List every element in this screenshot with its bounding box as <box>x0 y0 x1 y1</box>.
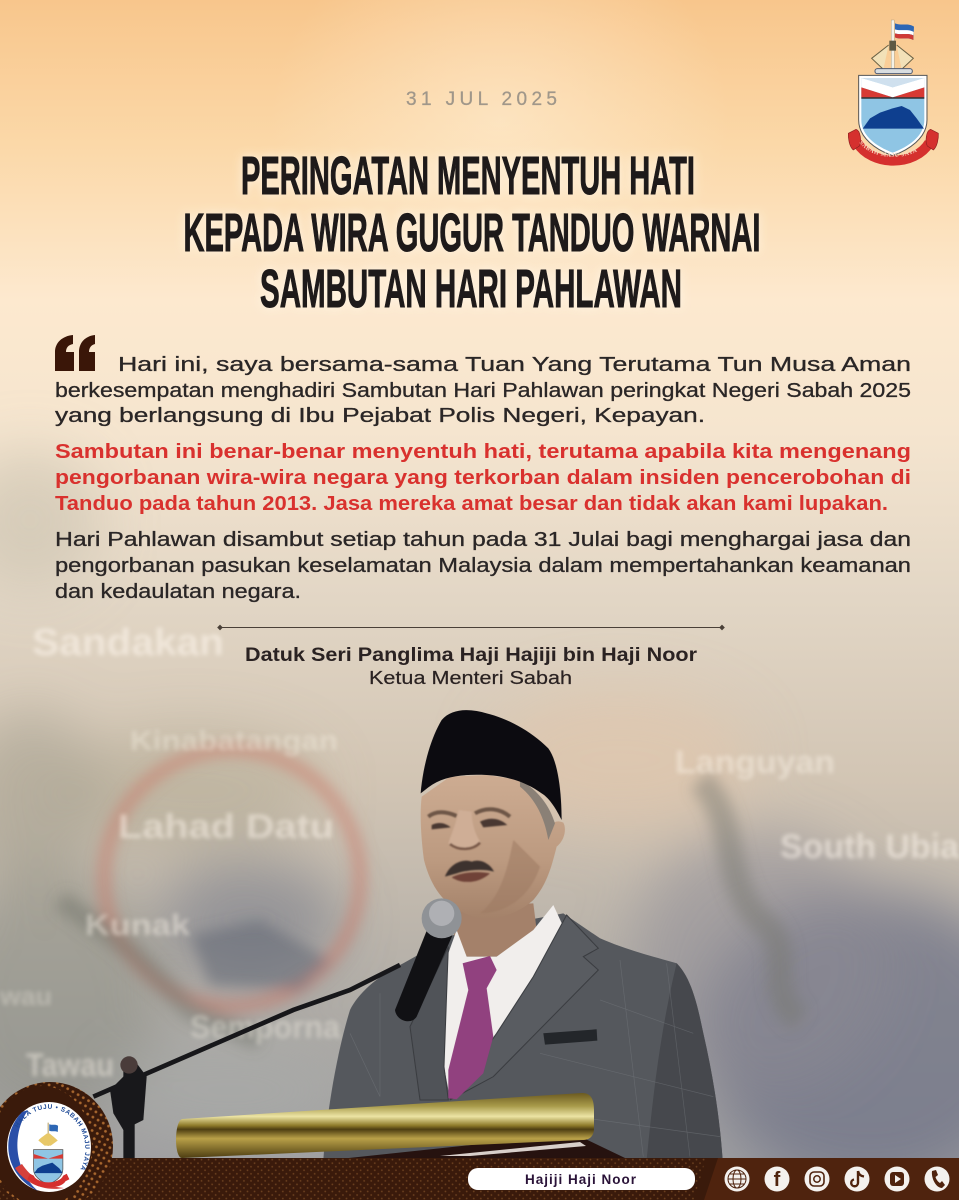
icon: website <box>724 1166 750 1192</box>
text block: red highlighted paragraph <box>55 441 911 515</box>
background: blurred map of eastern Sabah: Semporna <box>190 1009 340 1045</box>
footer bar <box>0 1158 959 1200</box>
name pill: Hajiji Haji Noor <box>525 1172 637 1187</box>
attribution: name: Datuk Seri Panglima Haji Hajiji bin Haji Noor <box>245 644 697 666</box>
logo badge: Hala Tuju Sabah Maju Jaya <box>0 1082 113 1200</box>
speaker tie <box>448 956 497 1099</box>
background: blurred map of eastern Sabah <box>0 450 959 1190</box>
icon: phone <box>924 1166 950 1192</box>
icon: facebook <box>764 1166 790 1192</box>
speaker right lapel <box>450 915 598 1100</box>
background: blurred map of eastern Sabah: South Ubia <box>780 828 959 866</box>
speaker name badge <box>543 1029 597 1045</box>
icon: instagram <box>804 1166 830 1192</box>
icon: quotation mark <box>55 335 95 371</box>
divider <box>217 625 725 630</box>
text block: red highlighted paragraph: pengorbanan wira-wira negara yang terkorban dalam insiden pencerobohan di <box>55 467 911 489</box>
speaker neck <box>453 903 537 957</box>
background: blurred map of eastern Sabah: Tawau <box>26 1047 114 1083</box>
text block: red highlighted paragraph: Sambutan ini benar-benar menyentuh hati, terutama apabila kita mengenang <box>55 441 911 463</box>
speaker suit <box>323 913 723 1160</box>
badge text ring: HALA TUJU • SABAH MAJU JAYA <box>14 1104 90 1170</box>
emblem: Sabah state crest <box>848 20 939 166</box>
name pill <box>468 1168 695 1190</box>
speaker facial features <box>428 809 540 913</box>
icon: tiktok <box>844 1166 870 1192</box>
speaker shirt <box>444 905 563 1098</box>
icon: facebook: f <box>774 1169 781 1191</box>
speaker left lapel <box>410 947 448 1100</box>
text block: red highlighted paragraph: Tanduo pada tahun 2013. Jasa mereka amat besar dan tidak akan kami lupakan. <box>55 493 888 515</box>
title <box>184 146 760 319</box>
microphone <box>395 898 462 1021</box>
background: blurred map of eastern Sabah: Kunak <box>85 909 190 942</box>
date: 31 JUL 2025 <box>406 89 557 110</box>
text block: opening paragraph: berkesempatan menghadiri Sambutan Hari Pahlawan peringkat Negeri Sabah 2025 <box>55 380 911 402</box>
text block: closing paragraph: dan kedaulatan negara. <box>55 581 301 603</box>
text block: opening paragraph: yang berlangsung di Ibu Pejabat Polis Negeri, Kepayan. <box>55 405 705 427</box>
background: blurred map of eastern Sabah: Lahad Datu <box>118 808 334 846</box>
speaker: Datuk Seri Hajiji at podium <box>93 710 723 1160</box>
background: blurred map of eastern Sabah: Languyan <box>675 744 835 780</box>
icon: youtube <box>884 1166 910 1192</box>
emblem: Sabah state crest: SABAH MAJU JAYA <box>860 140 918 157</box>
text block: closing paragraph: pengorbanan pasukan keselamatan Malaysia dalam mempertahankan keamanan <box>55 555 911 577</box>
podium <box>176 1093 625 1160</box>
text block: opening paragraph <box>55 354 911 427</box>
attribution: role: Ketua Menteri Sabah <box>369 667 572 688</box>
text block: opening paragraph: Hari ini, saya bersama-sama Tuan Yang Terutama Tun Musa Aman <box>118 354 911 376</box>
speaker songkok <box>421 710 562 820</box>
text block: closing paragraph: Hari Pahlawan disambut setiap tahun pada 31 Julai bagi menghargai jasa dan <box>55 529 911 551</box>
background: blurred map of eastern Sabah: wau <box>0 981 52 1011</box>
speaker head <box>421 775 565 918</box>
microphone stand pole <box>110 1056 147 1158</box>
background: blurred map of eastern Sabah: Kinabatangan <box>130 725 338 756</box>
background: blurred map of eastern Sabah: Sandakan <box>32 622 224 664</box>
microphone stand arm <box>93 965 400 1097</box>
speaker suit check pattern <box>350 960 720 1157</box>
speaker hair side <box>520 780 555 840</box>
text block: closing paragraph <box>55 529 911 603</box>
badge mini crest <box>27 1123 69 1188</box>
